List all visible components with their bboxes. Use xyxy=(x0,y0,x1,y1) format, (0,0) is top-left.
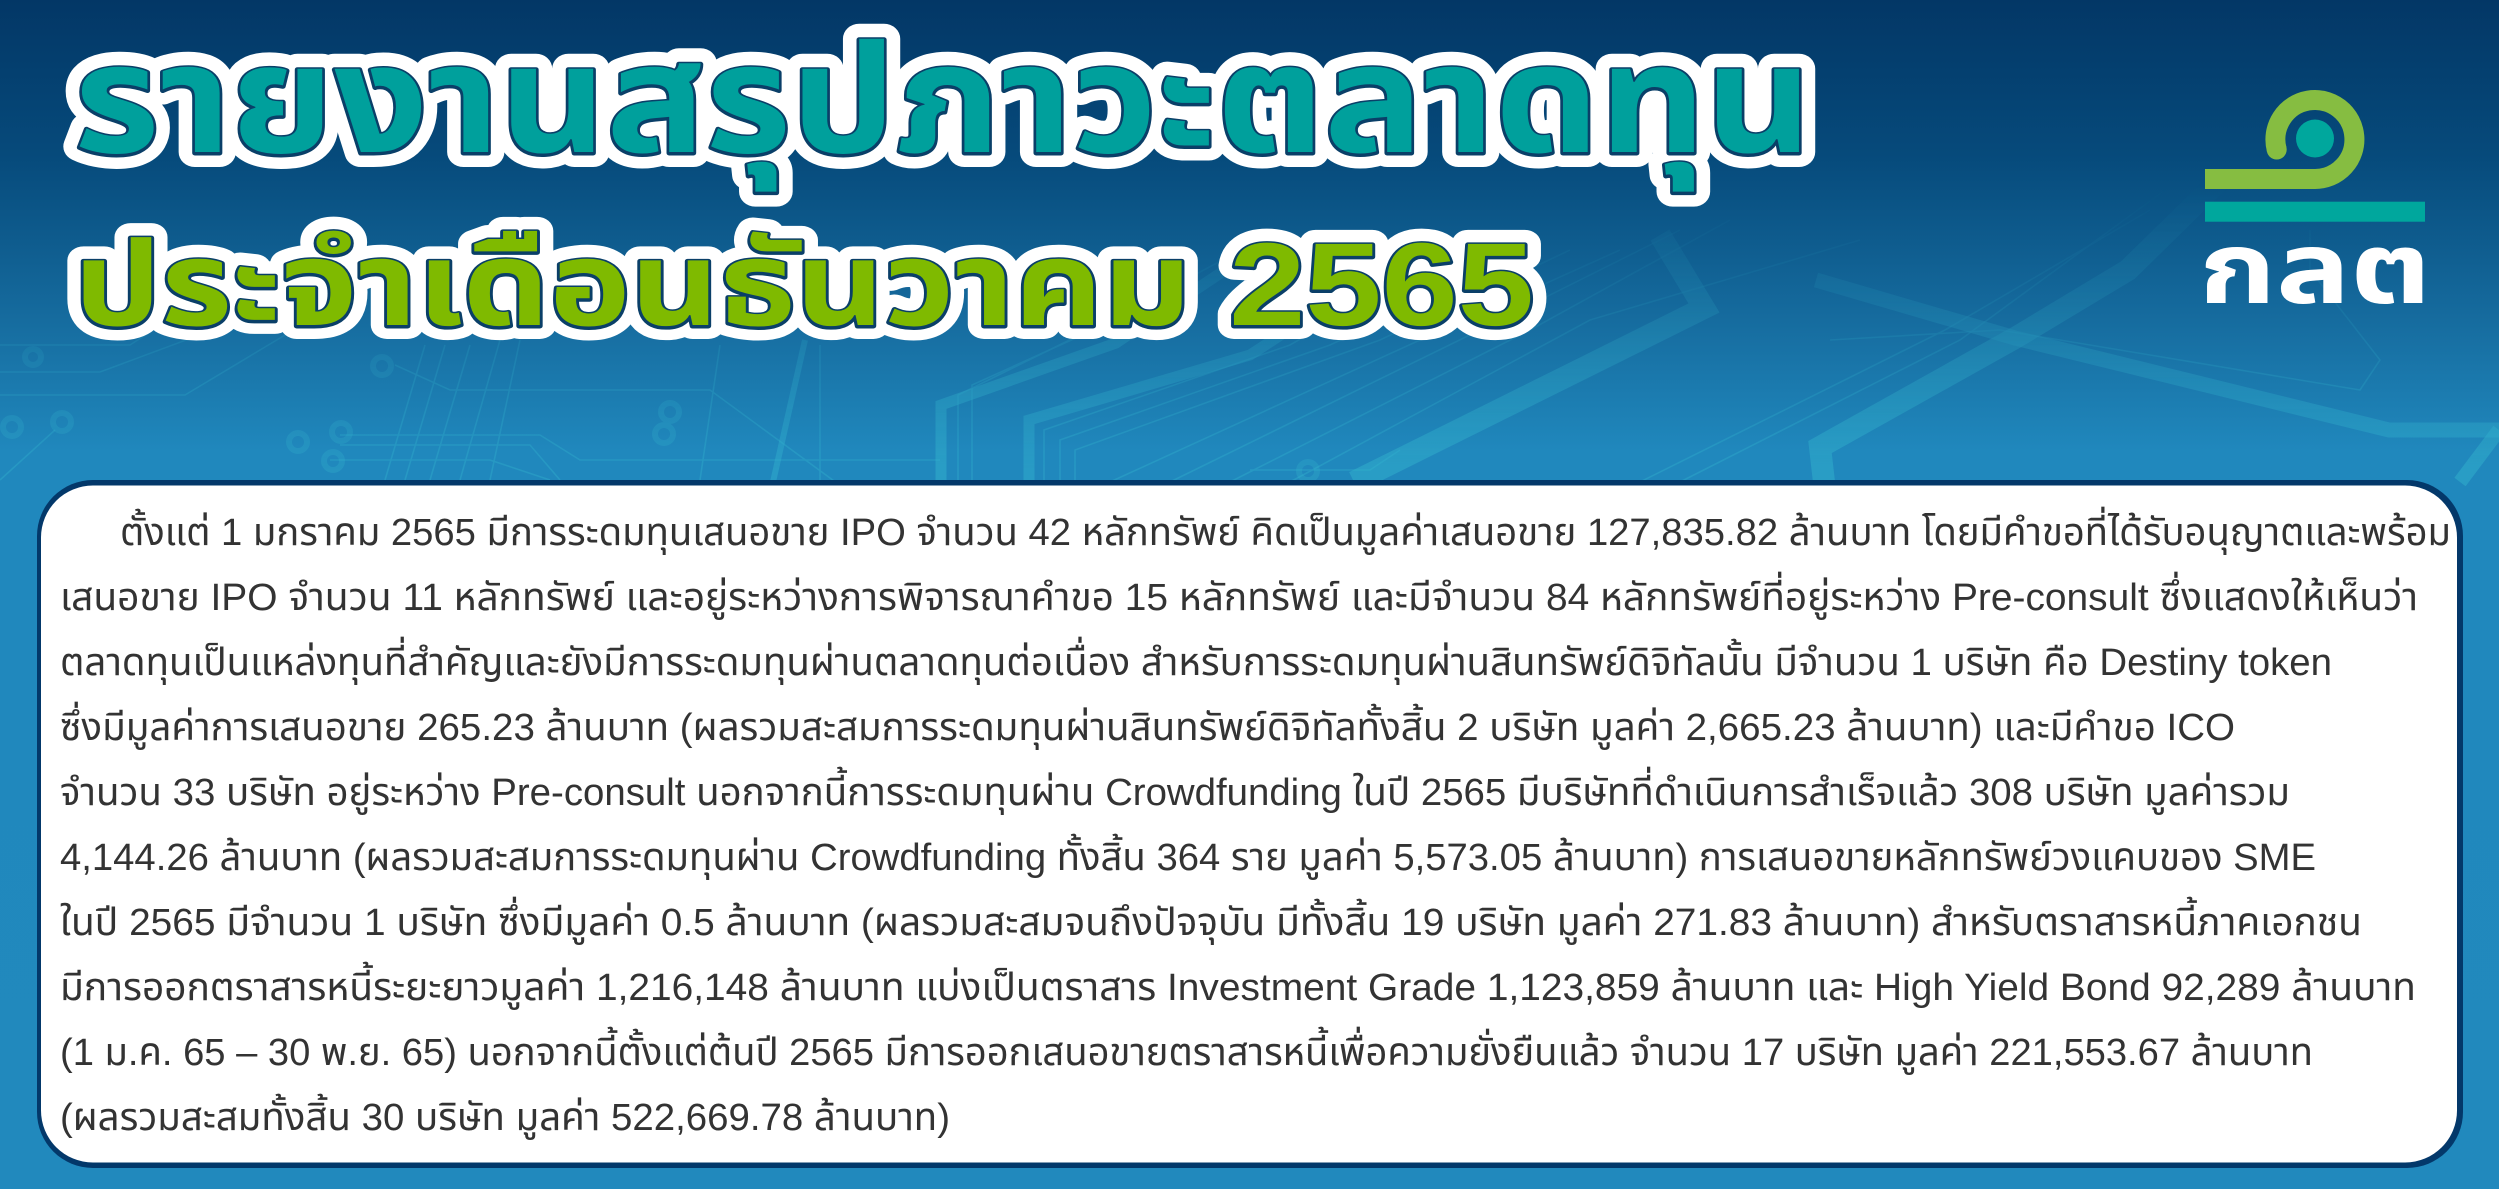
text block: market summary paragraph: ตลาดทุนเป็นแหล่งทุนที่สำคัญและยังมีการระดมทุนผ่านตลาดทุนต่อเนื่อง สำหรับการระดมทุนผ่านสินทรัพย์ดิจิทัลนั้น มีจำนวน 1 บริษัท คือ Destiny token xyxy=(60,636,2332,685)
icon: teal dot xyxy=(2296,120,2334,158)
text block: market summary paragraph: ในปี 2565 มีจำนวน 1 บริษัท ซึ่งมีมูลค่า 0.5 ล้านบาท (ผลรวมสะสมจนถึงปัจจุบัน มีทั้งสิ้น 19 บริษัท มูลค่า 271.83 ล้านบาท) สำหรับตราสารหนี้ภาคเอกชน xyxy=(60,896,2362,945)
icon: swirl rounded end xyxy=(2267,140,2287,160)
icon: teal bar xyxy=(2205,202,2425,222)
text block: market summary paragraph: (ผลรวมสะสมทั้งสิ้น 30 บริษัท มูลค่า 522,669.78 ล้านบาท) xyxy=(60,1093,950,1140)
heading: report title: รายงานสรุปภาวะตลาดทุน xyxy=(74,15,1812,192)
heading: month subtitle: ประจำเดือนธันวาคม 2565 xyxy=(74,219,1534,351)
heading: month subtitle: ประจำเดือนธันวาคม 2565 xyxy=(74,220,1534,352)
logo wordmark: กลต xyxy=(2199,213,2431,325)
text block: market summary paragraph: จำนวน 33 บริษัท อยู่ระหว่าง Pre-consult นอกจากนี้การระดมทุนผ่าน Crowdfunding ในปี 2565 มีบริษัทที่ดำเนินการสำเร็จแล้ว 308 บริษัท มูลค่ารวม xyxy=(60,766,2290,815)
text block: market summary paragraph: เสนอขาย IPO จำนวน 11 หลักทรัพย์ และอยู่ระหว่างการพิจารณาคำขอ 15 หลักทรัพย์ และมีจำนวน 84 หลักทรัพย์ที่อยู่ระหว่าง Pre-consult ซึ่งแสดงให้เห็นว่า xyxy=(60,571,2418,620)
panel body xyxy=(41,486,2457,1162)
text block: market summary paragraph: 4,144.26 ล้านบาท (ผลรวมสะสมการระดมทุนผ่าน Crowdfunding ทั้งสิ้น 364 ราย มูลค่า 5,573.05 ล้านบาท) การเสนอขายหลักทรัพย์วงแคบของ SME xyxy=(60,833,2316,880)
text block: market summary paragraph xyxy=(60,506,2451,1140)
text block: market summary paragraph: (1 ม.ค. 65 – 30 พ.ย. 65) นอกจากนี้ตั้งแต่ต้นปี 2565 มีการออกเสนอขายตราสารหนี้เพื่อความยั่งยืนแล้ว จำนวน 17 บริษัท มูลค่า 221,553.67 ล้านบาท xyxy=(60,1026,2313,1075)
circuit board pattern xyxy=(0,238,2499,486)
panel: summary text xyxy=(37,480,2463,1168)
logo: SEC Thailand xyxy=(2199,100,2431,325)
panel border xyxy=(37,480,2463,1168)
text block: market summary paragraph: ตั้งแต่ 1 มกราคม 2565 มีการระดมทุนเสนอขาย IPO จำนวน 42 หลักทรัพย์ คิดเป็นมูลค่าเสนอขาย 127,835.82 ล้านบาท โดยมีคำขอที่ได้รับอนุญาตและพร้อม xyxy=(120,506,2451,555)
heading: month subtitle: ประจำเดือนธันวาคม 2565 xyxy=(74,219,1534,351)
heading: report title: รายงานสรุปภาวะตลาดทุน xyxy=(74,15,1812,192)
icon: green swirl xyxy=(2205,100,2354,179)
text block: market summary paragraph: มีการออกตราสารหนี้ระยะยาวมูลค่า 1,216,148 ล้านบาท แบ่งเป็นตราสาร Investment Grade 1,123,859 ล้านบาท และ High Yield Bond 92,289 ล้านบาท xyxy=(60,961,2416,1010)
text block: market summary paragraph: ซึ่งมีมูลค่าการเสนอขาย 265.23 ล้านบาท (ผลรวมสะสมการระดมทุนผ่านสินทรัพย์ดิจิทัลทั้งสิ้น 2 บริษัท มูลค่า 2,665.23 ล้านบาท) และมีคำขอ ICO xyxy=(60,701,2235,750)
heading: report title: รายงานสรุปภาวะตลาดทุน xyxy=(74,16,1812,193)
